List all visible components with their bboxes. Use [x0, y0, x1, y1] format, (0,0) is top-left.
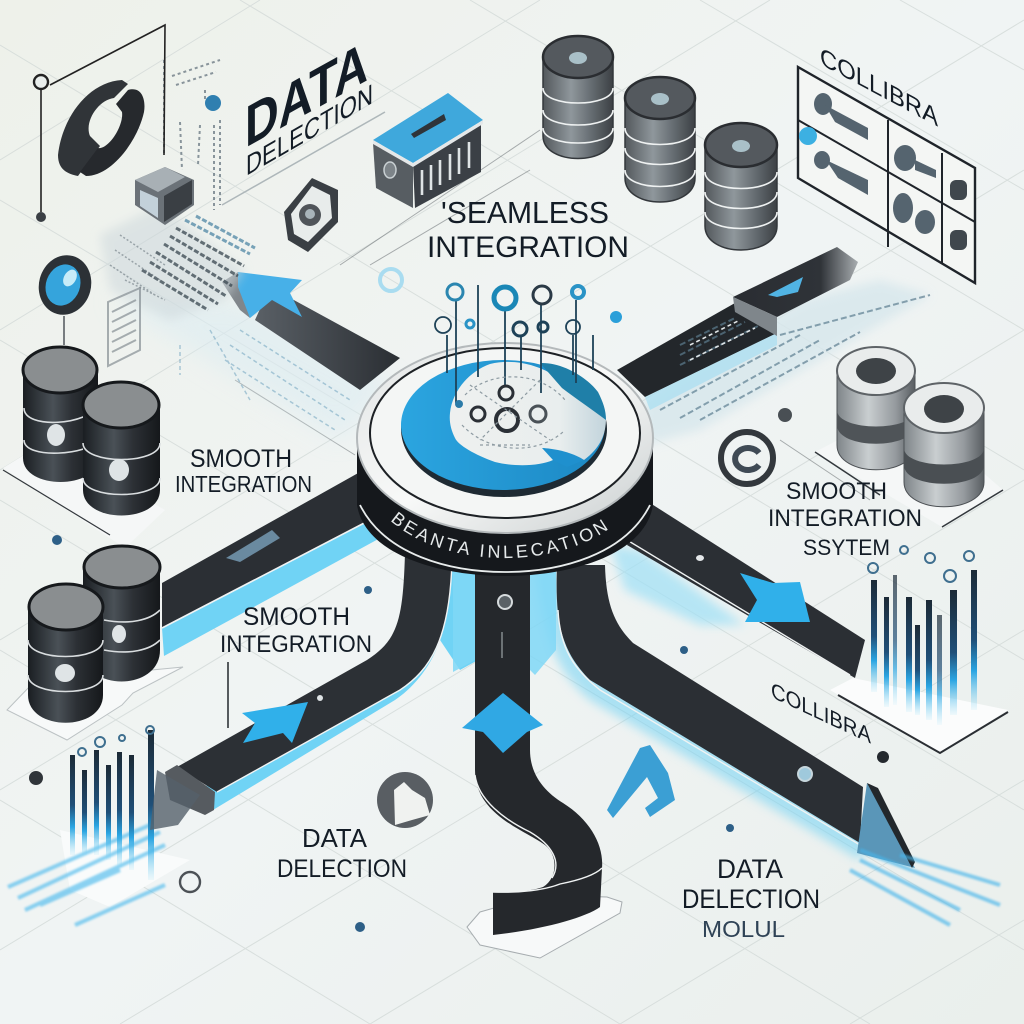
label: data delection left [277, 823, 407, 883]
barrel group: lower left [7, 546, 183, 740]
label: smooth integration system: SSYTEM [803, 535, 890, 560]
panel: collibra table [798, 42, 975, 283]
pin line [227, 662, 229, 728]
road: west [162, 472, 382, 656]
small dark node [877, 751, 889, 763]
data stream: upper left [100, 60, 255, 320]
arrow: north-west [238, 272, 302, 318]
road end device [165, 765, 215, 815]
blue box [373, 93, 483, 208]
blue streaks: lower right [850, 850, 1000, 925]
chart: left blue bars [8, 726, 200, 925]
label: collibra: COLLIBRA [771, 677, 871, 749]
label: smooth integration system [768, 478, 922, 560]
heading: seamless integration [427, 195, 629, 264]
hub label: BEANTA INLECATION [391, 512, 608, 558]
heading: data delection [222, 29, 385, 205]
label: smooth integration system: SMOOTH [786, 478, 887, 505]
label: smooth integration lower: INTEGRATION [220, 631, 372, 658]
label: data delection module [682, 854, 820, 942]
blue dot [610, 311, 622, 323]
label: smooth integration lower [220, 603, 372, 658]
heading: data delection: DATA [245, 29, 368, 161]
road: north-east [617, 247, 930, 445]
icon: hex badge [284, 178, 338, 252]
icon: copyright mark [721, 432, 773, 484]
arrow: north-east marker [768, 277, 803, 297]
database stack: top left [543, 36, 613, 158]
arrow: south [462, 693, 543, 753]
hub blue disc [401, 361, 607, 497]
dark icon cluster [377, 772, 433, 828]
heading: data delection: DELECTION [246, 79, 373, 182]
label: data delection left: DATA [302, 823, 368, 853]
heading: seamless integration: INTEGRATION [427, 231, 629, 264]
icon: blue chevron [607, 745, 675, 818]
database stack: top middle [625, 77, 695, 202]
road: north-west [222, 272, 400, 390]
icon: blue pin [32, 249, 98, 345]
road data noise [660, 295, 930, 420]
heading: collibra: COLLIBRA [820, 42, 938, 132]
label: smooth integration upper: SMOOTH [190, 445, 292, 473]
road: south-west curve [165, 553, 478, 815]
small dot left [29, 771, 43, 785]
icon: recycle ring [34, 75, 144, 222]
small ring [180, 872, 200, 892]
database stack: top right [705, 123, 777, 250]
label: smooth integration upper: INTEGRATION [175, 471, 312, 497]
road: south-east straight [610, 503, 865, 678]
hub ring top [357, 343, 653, 533]
label: data delection module: DATA [717, 854, 783, 884]
label: data delection left: DELECTION [277, 855, 407, 883]
arrow: south-west [242, 702, 308, 743]
heading: seamless integration: 'SEAMLESS [441, 195, 609, 230]
server cube [135, 167, 194, 225]
database barrels: right [815, 347, 1003, 527]
sketch panel [108, 288, 140, 366]
small ring icon [380, 269, 402, 291]
label: smooth integration lower: SMOOTH [243, 603, 350, 631]
road: south S-curve [453, 570, 622, 958]
arrow: south-east [857, 783, 915, 868]
label: smooth integration upper [175, 445, 312, 497]
small dots scattered [52, 535, 734, 932]
label: smooth integration system: INTEGRATION [768, 505, 922, 532]
hub nodes [435, 284, 593, 431]
label: data delection module: MOLUL [702, 916, 785, 942]
connector line [41, 25, 165, 212]
label: data delection module: DELECTION [682, 884, 820, 914]
hub band [357, 440, 653, 576]
central hub [356, 282, 654, 576]
small node [778, 408, 792, 422]
arrow: east [740, 573, 810, 622]
road: south-east curve [535, 565, 915, 868]
chart: right blue bars [830, 546, 1008, 753]
pale data wash: north west [110, 300, 395, 440]
barrel group: upper left [3, 347, 165, 548]
